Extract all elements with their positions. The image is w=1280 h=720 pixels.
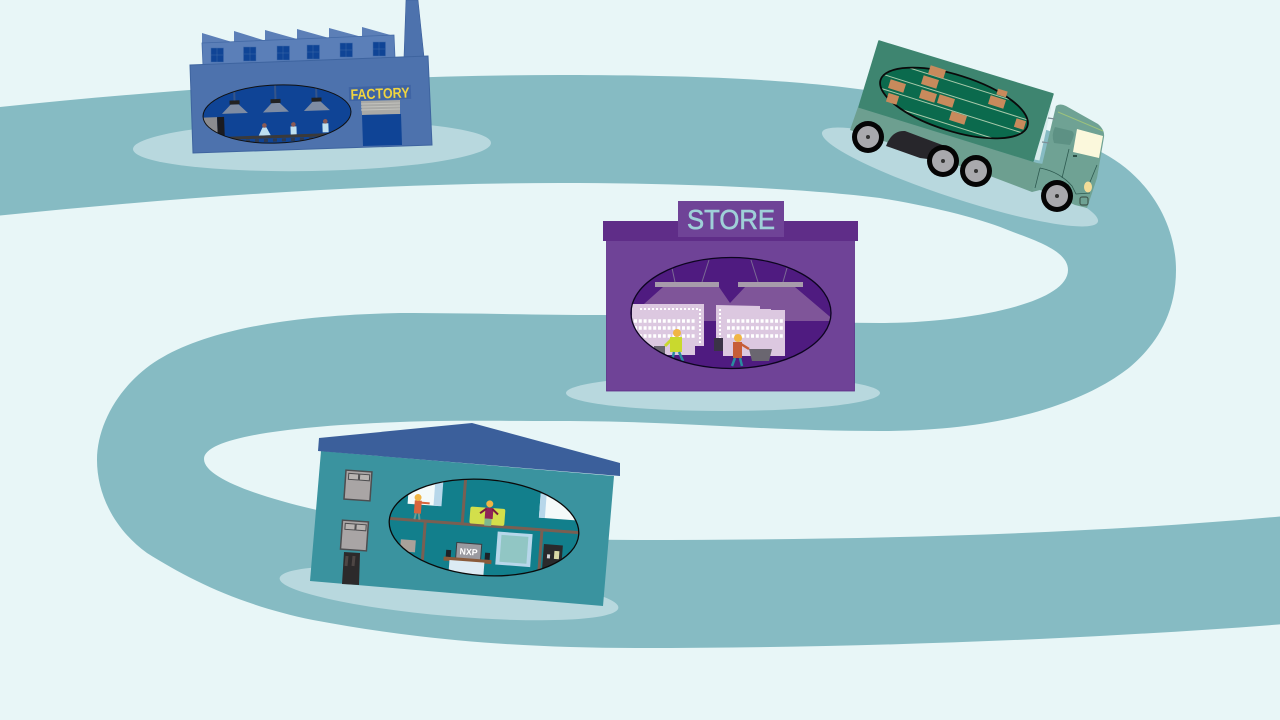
bedroom window — [495, 532, 533, 567]
side window — [1053, 127, 1074, 145]
truck window oval — [879, 66, 1029, 140]
shopper right — [732, 334, 772, 366]
hanging wires — [672, 260, 787, 282]
cab door lines — [1035, 149, 1097, 194]
dark cabinet right — [542, 544, 563, 569]
house — [310, 423, 620, 606]
person left — [413, 494, 430, 520]
grille — [1080, 197, 1088, 205]
tv and speakers — [443, 542, 493, 564]
ladder rungs — [1042, 118, 1055, 143]
chassis — [850, 107, 1050, 192]
mirror handle — [1073, 155, 1077, 157]
factory — [190, 0, 432, 153]
upper windows — [211, 42, 386, 62]
sofa — [469, 506, 505, 526]
house window oval — [388, 478, 580, 576]
light cones — [625, 287, 835, 321]
lamp bars — [655, 282, 719, 287]
shelf items — [634, 321, 784, 336]
house roof — [318, 423, 620, 476]
conveyor — [228, 133, 328, 140]
ground shadow: factory — [133, 118, 491, 174]
chimney — [404, 0, 424, 57]
lower window — [340, 520, 368, 551]
container — [859, 41, 1053, 161]
sawtooth roof — [202, 27, 394, 45]
person on sofa — [479, 500, 499, 526]
ground shadow: store — [566, 375, 880, 411]
main body — [190, 56, 432, 153]
cab stripe — [1058, 112, 1103, 131]
store — [603, 201, 858, 391]
factory sign: FACTORY — [350, 85, 410, 104]
winding road — [0, 75, 1280, 648]
cargo boxes — [886, 65, 1026, 130]
shelves left — [632, 304, 704, 355]
shelves — [882, 68, 1027, 138]
store sign: STORE — [687, 204, 775, 235]
store window oval — [625, 258, 835, 368]
window left — [408, 484, 440, 506]
gap ladder — [1037, 106, 1049, 160]
upper window — [344, 470, 372, 501]
shopper left — [654, 329, 683, 361]
cab — [1032, 104, 1104, 208]
upper storey — [202, 35, 395, 66]
loading door — [361, 100, 402, 146]
tv and speakers: NXP — [459, 546, 478, 558]
lamps — [222, 86, 330, 114]
front door — [342, 552, 360, 585]
appliance left — [400, 539, 416, 552]
shelves right — [716, 305, 785, 356]
headlight — [1084, 182, 1092, 192]
store body — [606, 240, 854, 391]
wheels — [852, 121, 1073, 212]
floors and walls — [390, 480, 578, 570]
factory window oval — [202, 81, 352, 146]
small cart — [714, 338, 723, 351]
ground shadow: house — [278, 555, 620, 631]
cab window — [1073, 129, 1103, 158]
ground shadow: truck — [815, 111, 1105, 243]
window right — [538, 494, 575, 520]
store roof — [603, 221, 858, 241]
truck — [850, 41, 1104, 212]
workers — [258, 119, 329, 136]
bed — [448, 560, 484, 575]
house body — [310, 451, 614, 606]
rear skirt — [886, 131, 945, 160]
